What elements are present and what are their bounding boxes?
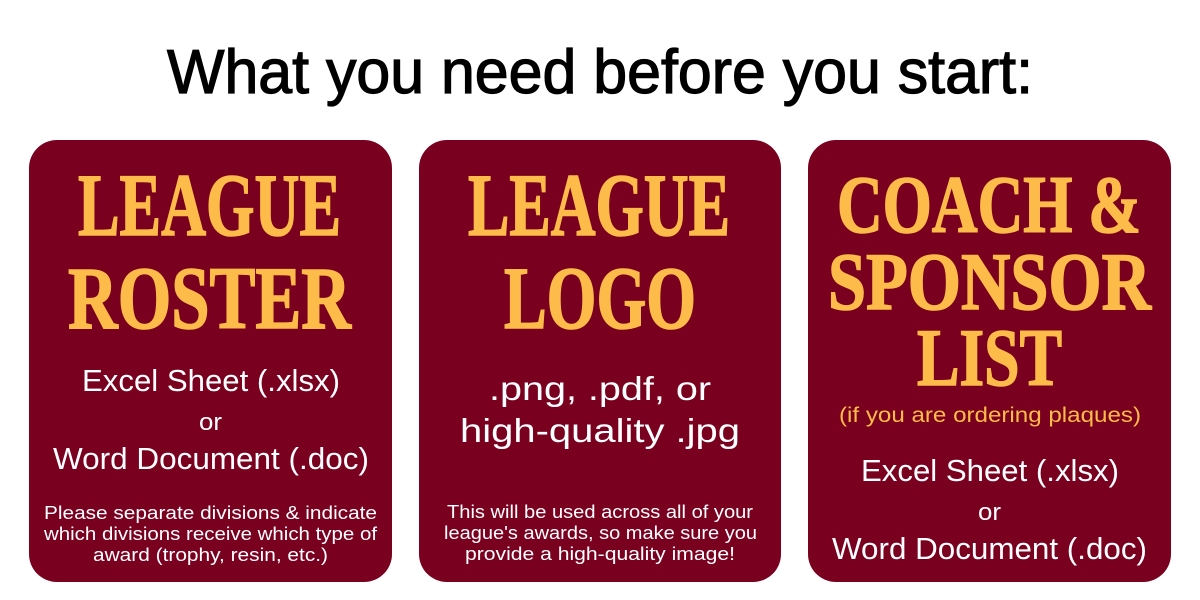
text: list file formats bbox=[832, 453, 1147, 566]
text: logo note: provide a high-quality image! bbox=[465, 543, 735, 564]
heading: league logo bbox=[468, 157, 730, 348]
heading: coach and sponsor list: LIST bbox=[917, 312, 1062, 403]
text: list file formats: Excel Sheet (.xlsx) bbox=[861, 453, 1119, 488]
text: roster file formats: Word Document (.doc) bbox=[53, 441, 369, 476]
text: roster file formats bbox=[53, 363, 369, 476]
text: roster file formats: Excel Sheet (.xlsx) bbox=[82, 363, 340, 398]
text: roster file formats: or bbox=[199, 409, 222, 436]
heading: coach and sponsor list bbox=[828, 159, 1152, 403]
text: list file formats: or bbox=[978, 499, 1001, 526]
panel: league logo bbox=[419, 140, 781, 582]
text: roster note: which divisions receive which type of bbox=[43, 523, 378, 544]
text: roster note bbox=[43, 502, 378, 565]
text: logo file formats bbox=[460, 370, 740, 449]
heading: league roster: LEAGUE bbox=[78, 157, 341, 255]
panel: coach and sponsor list bbox=[808, 140, 1171, 582]
heading: league logo: LOGO bbox=[504, 250, 696, 348]
heading: league roster bbox=[68, 157, 352, 348]
heading: league logo: LEAGUE bbox=[468, 157, 730, 255]
text: logo note: league's awards, so make sure you bbox=[444, 522, 757, 543]
text: roster note: Please separate divisions & indicate bbox=[44, 502, 377, 523]
text: plaques note: (if you are ordering plaques) bbox=[839, 404, 1141, 427]
text: list file formats: Word Document (.doc) bbox=[832, 531, 1147, 566]
panel: league roster bbox=[29, 140, 392, 582]
text: logo note: This will be used across all of your bbox=[447, 501, 753, 522]
text: logo note bbox=[444, 501, 757, 564]
text: logo file formats: .png, .pdf, or bbox=[489, 370, 711, 407]
heading: league roster: ROSTER bbox=[68, 250, 352, 348]
text: logo file formats: high-quality .jpg bbox=[460, 412, 740, 449]
title: What you need before you start: bbox=[167, 38, 1033, 107]
text: roster note: award (trophy, resin, etc.) bbox=[93, 544, 328, 565]
